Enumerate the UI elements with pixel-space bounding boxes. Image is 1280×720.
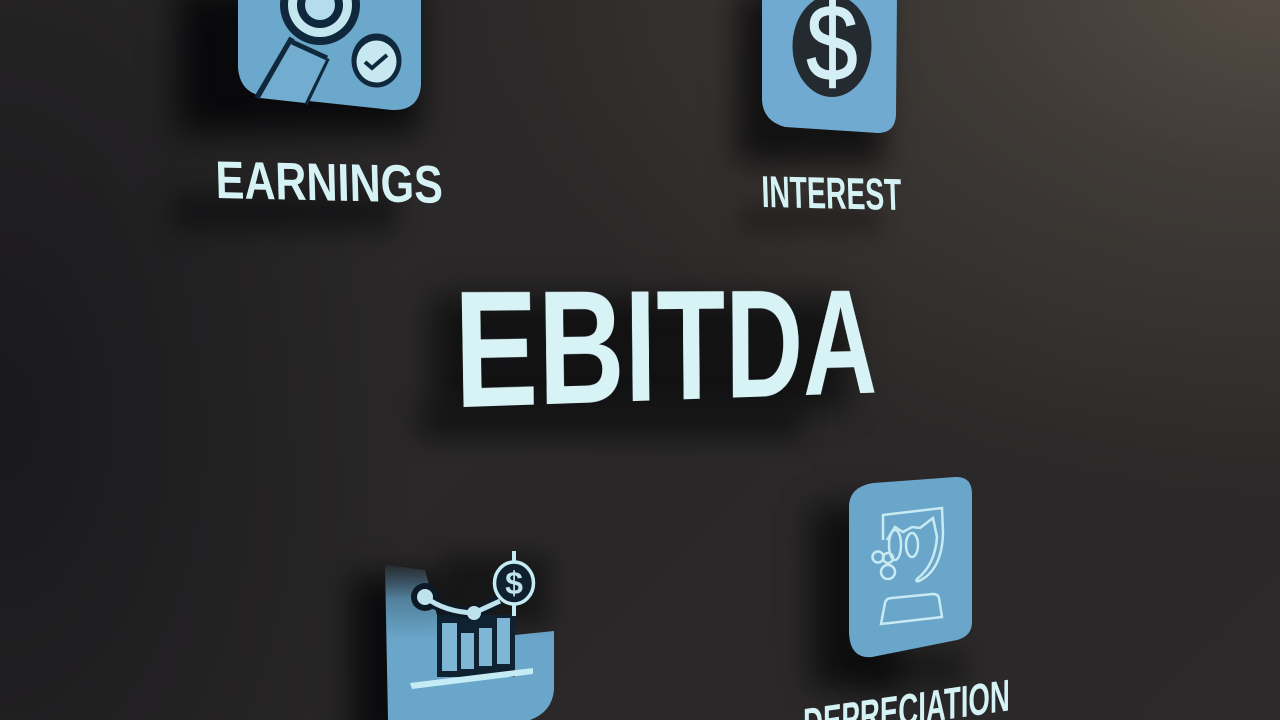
panel: earnings bbox=[215, 0, 444, 215]
icon: interest tile bbox=[762, 0, 897, 133]
label: earnings: EARNINGS bbox=[215, 150, 444, 215]
icon: earnings tile bbox=[238, 0, 421, 110]
icon: tile bbox=[385, 565, 554, 720]
label: interest: INTEREST bbox=[761, 167, 902, 220]
panel: interest bbox=[761, 0, 902, 220]
icon: dollar coin bbox=[494, 551, 534, 616]
icon: depreciation tile bbox=[849, 477, 972, 657]
title: EBITDA bbox=[452, 257, 877, 444]
panel: amortization chart icon bbox=[385, 551, 554, 720]
panel: depreciation bbox=[803, 477, 1010, 720]
icon: bar chart bbox=[410, 615, 533, 689]
icon: trend line bbox=[411, 583, 500, 620]
icon: dollar coin: $ bbox=[505, 565, 523, 601]
